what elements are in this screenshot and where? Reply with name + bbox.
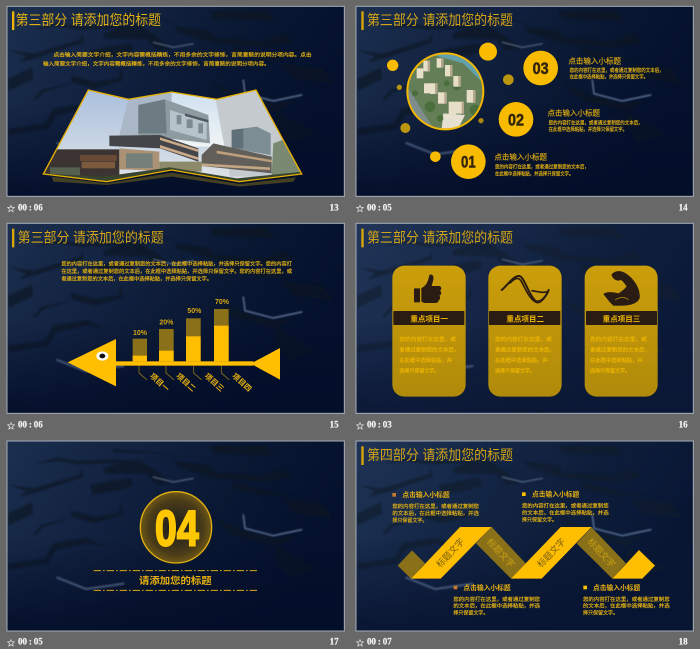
lower right note: 择只保留文字。 bbox=[583, 609, 618, 617]
item labels bbox=[148, 371, 254, 394]
footer: 00 : 03 bbox=[367, 420, 392, 430]
item 03: 在此框中选择粘贴，并选择只保留文字。 bbox=[570, 73, 648, 81]
slide 15: fish chart bbox=[7, 223, 344, 430]
item 02: 您的内容打在这里，或者通过复制您的文本后， bbox=[549, 118, 643, 126]
lower left note: 的文本后，在此框中选择粘贴，并选 bbox=[453, 602, 540, 610]
lower left note: 您的内容打在这里，或者通过复制您 bbox=[453, 595, 540, 603]
footer bbox=[357, 637, 688, 647]
card 2: 在此框中选择粘贴，并 bbox=[495, 356, 548, 364]
icon: ribbon wave bbox=[502, 276, 549, 303]
percent labels: 20% bbox=[159, 319, 174, 326]
fish chart bbox=[68, 299, 280, 394]
slide 18: zigzag ribbon bbox=[356, 441, 693, 647]
slide 13: folded photo bbox=[7, 6, 344, 212]
footer: 00 : 07 bbox=[367, 637, 392, 647]
upper right note: 点击输入小标题 bbox=[532, 489, 580, 498]
footer: 00 : 05 bbox=[367, 202, 392, 212]
footer: 16 bbox=[679, 420, 688, 430]
text block bbox=[43, 51, 312, 67]
item 01: 您的内容打在这里，或者通过复制您的文本后， bbox=[495, 162, 589, 170]
icon: thumbs up bbox=[414, 275, 441, 303]
slide 14: numbered circles bbox=[356, 6, 693, 212]
tall tower bbox=[138, 99, 210, 143]
card 2: 者通过复制您的文本后， bbox=[495, 346, 555, 354]
text block: 您的内容打在这里，或者通过复制您的文本后，在此框中选择粘贴，并选择只保留文字。您的内容打 bbox=[61, 260, 292, 268]
title: 第三部分 请添加您的标题 bbox=[18, 229, 164, 245]
footer: 00 : 06 bbox=[18, 202, 43, 212]
trees and ground bbox=[272, 140, 300, 175]
right low block bbox=[202, 143, 272, 173]
zigzag ribbon: 标题文字 bbox=[535, 536, 567, 570]
lower right note: 的文本后，在此框中选择粘贴，并选 bbox=[583, 602, 670, 610]
item 02: 在此框中选择粘贴，并选择只保留文字。 bbox=[549, 125, 627, 133]
text block: 点击输入简要文字介绍，文字内容需概括精炼，不用多余的文字修饰，言简意赅的说明分项内容。点击 bbox=[53, 51, 312, 59]
card 2: 您的内容打在这里，或 bbox=[495, 335, 552, 343]
footer bbox=[8, 637, 339, 647]
lower left note: 点击输入小标题 bbox=[463, 583, 511, 592]
percent labels bbox=[133, 299, 230, 337]
title: 第三部分 请添加您的标题 bbox=[367, 12, 513, 28]
card 1: 者通过复制您的文本后， bbox=[399, 346, 459, 354]
card 1 bbox=[392, 266, 466, 397]
title: 第三部分 请添加您的标题 bbox=[16, 12, 161, 28]
footer: 18 bbox=[679, 637, 688, 647]
footer: 14 bbox=[679, 202, 688, 212]
folded building photo bbox=[40, 87, 307, 187]
bars bbox=[133, 309, 229, 361]
percent labels: 50% bbox=[187, 308, 202, 315]
percent labels: 70% bbox=[215, 299, 230, 306]
fish body bbox=[68, 339, 280, 386]
lower right note: 您的内容打在这里，或者通过复制您 bbox=[583, 595, 670, 603]
item 01 bbox=[451, 144, 589, 179]
card 2 bbox=[488, 266, 562, 397]
card 1: 重点项目一 bbox=[410, 315, 449, 324]
item 02: 点击输入小标题 bbox=[547, 109, 601, 118]
footer bbox=[357, 420, 688, 430]
upper left note: 的文本后，在此框中选择粘贴，并选 bbox=[392, 509, 479, 517]
text block: 者通过复制您的文本后，在此框中选择粘贴，并选择只保留文字。 bbox=[61, 275, 212, 283]
tan block bbox=[119, 148, 159, 171]
item 03 bbox=[523, 51, 664, 85]
item labels: 项目二 bbox=[174, 371, 198, 394]
title: 第四部分 请添加您的标题 bbox=[367, 447, 513, 463]
card 3 bbox=[585, 266, 658, 397]
lower left note: 择只保留文字。 bbox=[453, 609, 488, 617]
lower right note: 点击输入小标题 bbox=[593, 583, 641, 592]
item labels: 项目四 bbox=[230, 371, 254, 394]
card 1: 选择只保留文字。 bbox=[399, 366, 439, 374]
card 3: 者通过复制您的文本后， bbox=[590, 346, 650, 354]
upper left note: 点击输入小标题 bbox=[402, 490, 450, 499]
zigzag ribbon bbox=[398, 527, 655, 579]
card 3: 重点项目三 bbox=[603, 315, 640, 324]
text block: 输入简要文字介绍，文字内容需概括精炼，不用多余的文字修饰，言简意赅的说明分项内容。 bbox=[43, 59, 270, 67]
text block: 在这里，或者通过复制您的文本后，在此框中选择粘贴，并选择只保留文字。您的内容打在这里，或 bbox=[61, 267, 292, 275]
upper right note bbox=[522, 489, 609, 523]
item 02 bbox=[499, 102, 643, 137]
upper left note: 择只保留文字。 bbox=[392, 516, 427, 524]
number badge bbox=[140, 492, 212, 563]
right tower bbox=[232, 127, 271, 155]
footer: 17 bbox=[330, 637, 339, 647]
zigzag ribbon: 标题文字 bbox=[485, 536, 517, 570]
section heading: 请添加您的标题 bbox=[139, 575, 212, 587]
upper right note: 您的内容打在这里，或者通过复制您 bbox=[522, 501, 609, 509]
item 03: 您的内容打在这里，或者通过复制您的文本后， bbox=[570, 66, 664, 74]
zigzag ribbon: 标题文字 bbox=[585, 536, 618, 570]
card 3: 在此框中选择粘贴，并 bbox=[590, 356, 643, 364]
fish eye bbox=[96, 351, 108, 361]
zigzag ribbon: 标题文字 bbox=[434, 536, 466, 570]
card 3: 您的内容打在这里，或 bbox=[590, 335, 647, 343]
number badge: 04 bbox=[155, 500, 199, 556]
card 3: 选择只保留文字。 bbox=[590, 366, 630, 374]
text block bbox=[61, 260, 292, 283]
card 2: 选择只保留文字。 bbox=[495, 366, 535, 374]
leader lines bbox=[139, 366, 229, 380]
slide 17: section cover bbox=[7, 441, 344, 647]
title: 第三部分 请添加您的标题 bbox=[367, 229, 513, 245]
card 2: 重点项目二 bbox=[506, 315, 544, 324]
lower right note bbox=[583, 583, 670, 617]
footer: 15 bbox=[330, 420, 339, 430]
footer bbox=[357, 202, 688, 212]
item labels: 项目三 bbox=[203, 371, 226, 394]
upper left note: 您的内容打在这里，或者通过复制您 bbox=[392, 502, 479, 510]
item labels: 项目一 bbox=[148, 371, 171, 394]
upper right note: 择只保留文字。 bbox=[522, 515, 557, 523]
footer: 00 : 06 bbox=[18, 420, 43, 430]
footer bbox=[8, 202, 339, 212]
slide 16: three cards bbox=[356, 223, 693, 430]
left low block bbox=[44, 149, 120, 177]
footer: 13 bbox=[330, 202, 339, 212]
circular photo bbox=[407, 53, 485, 132]
item 01: 01 bbox=[461, 153, 476, 172]
item 03: 03 bbox=[533, 59, 549, 78]
upper right note: 的文本后，在此框中选择粘贴，并选 bbox=[522, 508, 609, 516]
footer bbox=[8, 420, 339, 430]
podium bbox=[109, 135, 198, 162]
percent labels: 10% bbox=[133, 330, 148, 337]
item 02: 02 bbox=[508, 110, 524, 129]
icon: flexed arm bbox=[603, 271, 640, 306]
decorative dots bbox=[387, 43, 514, 162]
footer: 00 : 05 bbox=[18, 637, 43, 647]
item 01: 点击输入小标题 bbox=[494, 152, 548, 161]
card 1: 在此框中选择粘贴，并 bbox=[399, 356, 452, 364]
card 1: 您的内容打在这里，或 bbox=[399, 335, 456, 343]
item 01: 在此框中选择粘贴，并选择只保留文字。 bbox=[495, 169, 573, 177]
lower left note bbox=[453, 583, 540, 617]
item 03: 点击输入小标题 bbox=[568, 56, 622, 65]
upper left note bbox=[392, 490, 479, 524]
